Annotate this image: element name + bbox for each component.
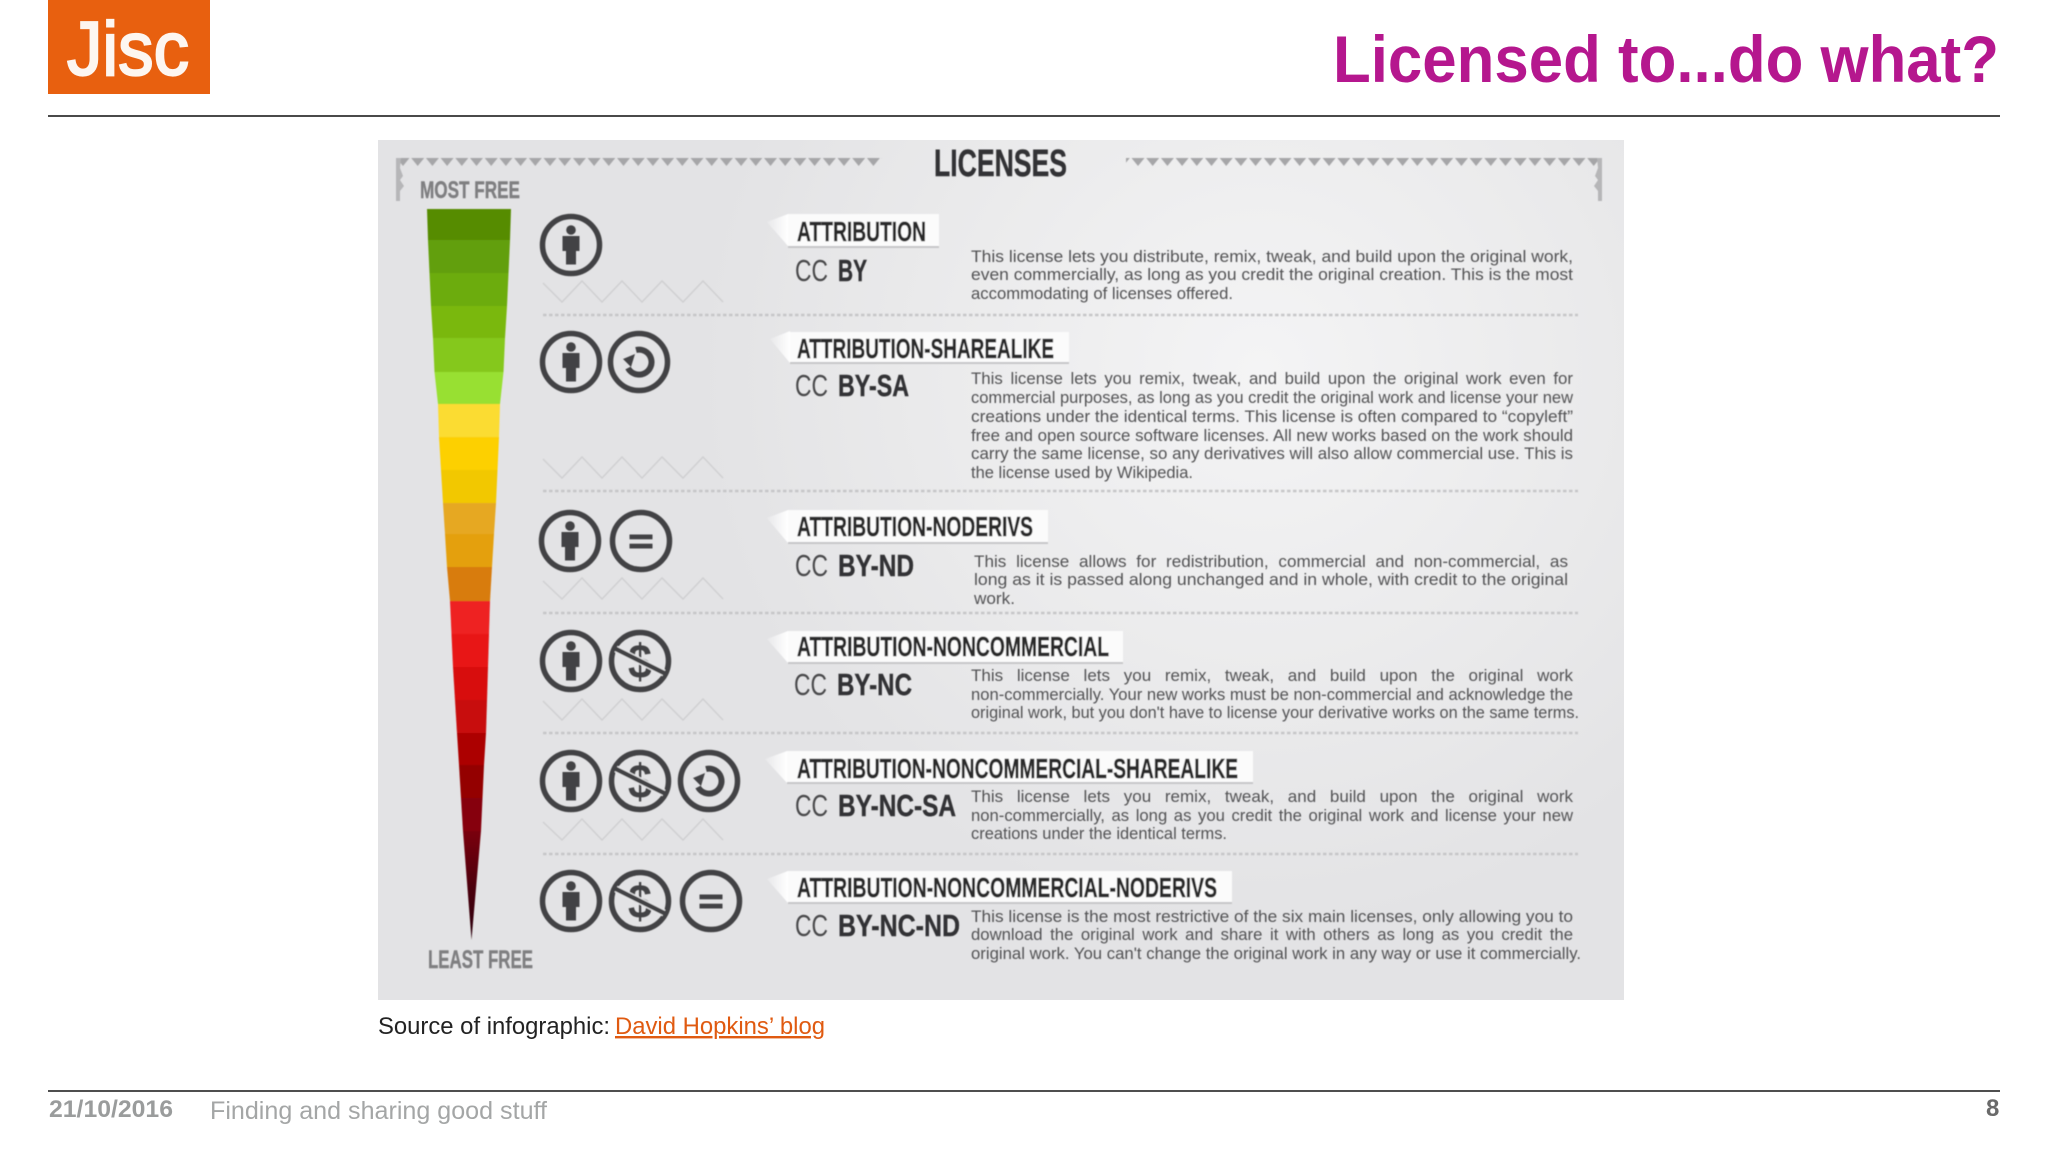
code: CC [795, 253, 828, 288]
description: This license lets you remix, tweak, and build upon the original work even for [971, 369, 1573, 388]
freedom scale wedge [427, 209, 511, 940]
code [795, 253, 867, 288]
name tag: ATTRIBUTION-NODERIVS [797, 511, 1033, 542]
code: CC [795, 548, 828, 583]
code [795, 548, 914, 583]
icons: by, sa [542, 334, 668, 390]
name tag: ATTRIBUTION [797, 216, 926, 247]
row 1: attribution [542, 214, 1573, 303]
code: BY-SA [838, 368, 909, 403]
icons: by, nc, nd [542, 872, 740, 930]
source line [378, 1013, 825, 1040]
description: This license is the most restrictive of the six main licenses, only allowing you to [971, 907, 1573, 926]
description: creations under the identical terms. [971, 824, 1227, 843]
description: free and open source software licenses. All new works based on the work should [971, 426, 1573, 445]
row 5: attribution-noncommercial-sharealike [542, 751, 1574, 843]
description: commercial purposes, as long as you credit the original work and license your new [971, 388, 1574, 407]
icons: by, nc, sa [542, 752, 738, 810]
name tag: ATTRIBUTION-NONCOMMERCIAL [797, 631, 1109, 662]
row 3: attribution-noderivs [542, 510, 1568, 608]
description: non-commercially. Your new works must be non-commercial and acknowledge the [971, 685, 1573, 704]
description: work. [973, 589, 1015, 608]
code: BY [838, 253, 867, 288]
code: CC [794, 667, 827, 702]
icons: by, nc, sa: $ [628, 756, 652, 809]
icon: by [542, 216, 600, 274]
source line: Source of infographic: [378, 1013, 610, 1040]
row 4: attribution-noncommercial [542, 631, 1579, 722]
code [795, 788, 956, 823]
row 6: attribution-noncommercial-noderivs [542, 871, 1581, 963]
icons: by, nc: $ [628, 636, 652, 689]
icons: by, nc, nd: $ [628, 876, 652, 929]
description: accommodating of licenses offered. [971, 284, 1233, 303]
label: least free: LEAST FREE [428, 946, 533, 974]
code: CC [795, 368, 828, 403]
description: This license lets you remix, tweak, and build upon the original work [971, 787, 1573, 806]
code: BY-NC-SA [838, 788, 956, 823]
description: long as it is passed along unchanged and in whole, with credit to the original [974, 570, 1568, 589]
description: This license lets you distribute, remix, tweak, and build upon the original work, [971, 247, 1573, 266]
code [795, 368, 909, 403]
heading: LICENSES: LICENSES [934, 143, 1067, 185]
description: creations under the identical terms. This license is often compared to “copyleft” [971, 407, 1573, 426]
description: original work, but you don't have to license your derivative works on the same terms. [971, 703, 1579, 722]
description: download the original work and share it with others as long as you credit the [971, 925, 1573, 944]
code: BY-NC [837, 667, 912, 702]
icons: by, nc [542, 632, 668, 690]
description [971, 666, 1579, 722]
description [971, 907, 1581, 963]
footer text: Finding and sharing good stuff [210, 1097, 547, 1125]
name tag: ATTRIBUTION-NONCOMMERCIAL-SHAREALIKE [797, 753, 1238, 784]
description: carry the same license, so any derivatives will also allow commercial use. This is [971, 444, 1573, 463]
title: Licensed to...do what? [1333, 22, 1999, 96]
description: original work. You can't change the original work in any way or use it commercially. [971, 944, 1581, 963]
row 2: attribution-sharealike [542, 331, 1574, 482]
name tag: ATTRIBUTION-SHAREALIKE [797, 333, 1054, 364]
name tag: ATTRIBUTION-NONCOMMERCIAL-NODERIVS [797, 872, 1217, 903]
page number: 8 [1986, 1095, 1999, 1122]
code [795, 908, 960, 943]
description: This license lets you remix, tweak, and build upon the original work [971, 666, 1573, 685]
description [971, 369, 1574, 482]
description [971, 787, 1574, 843]
footer date: 21/10/2016 [49, 1096, 173, 1123]
code: CC [795, 908, 828, 943]
description: non-commercially, as long as you credit the original work and license your new [971, 806, 1574, 825]
description: This license allows for redistribution, commercial and non-commercial, as [974, 552, 1568, 571]
code [794, 667, 912, 702]
Jisc logo: Jisc [67, 7, 189, 92]
description [971, 247, 1573, 303]
description: even commercially, as long as you credit the original creation. This is the most [971, 265, 1573, 284]
icons: by, nd [542, 512, 670, 570]
label: most free: MOST FREE [420, 177, 520, 204]
code: BY-ND [838, 548, 914, 583]
source line: David Hopkins’ blog [615, 1013, 825, 1040]
code: BY-NC-ND [838, 908, 960, 943]
infographic panel [378, 140, 1624, 1000]
description: the license used by Wikipedia. [971, 463, 1193, 482]
code: CC [795, 788, 828, 823]
description [973, 552, 1568, 608]
